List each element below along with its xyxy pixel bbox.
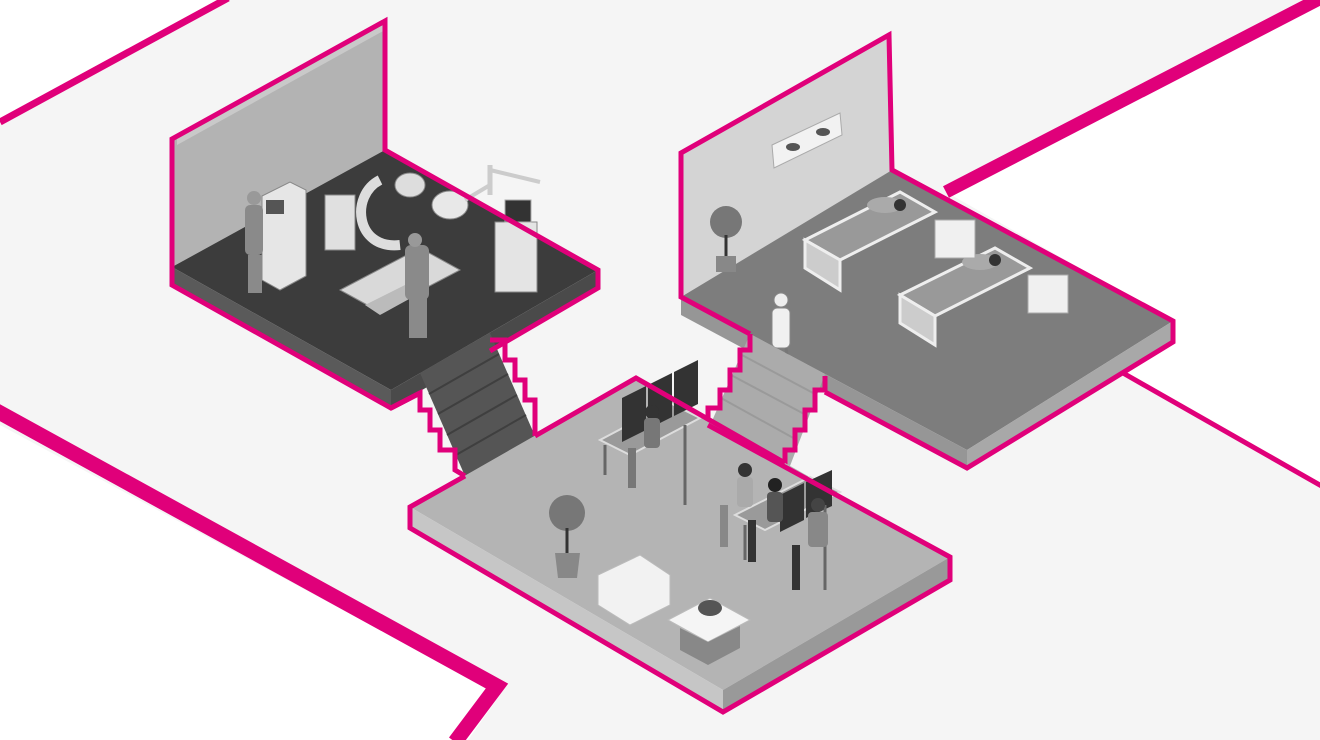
ward: bed 2: [900, 248, 1030, 345]
OR: C-arm: [325, 173, 425, 250]
OR: surgical lamp: [432, 165, 540, 219]
ward: wall shelf: [772, 113, 842, 168]
ward: nurse: [772, 293, 792, 398]
waiting: plant: [549, 495, 585, 578]
room outlines: [172, 21, 1173, 712]
ward: bed 1: [805, 192, 935, 290]
room: ward: [681, 35, 1173, 468]
waiting: people: [628, 405, 828, 590]
OR: operating table: [340, 248, 460, 315]
ward: plant: [710, 206, 742, 272]
room: operating room: [172, 21, 598, 408]
waiting: chairs row 1: [600, 360, 700, 505]
ward: bedside tables: [935, 220, 1068, 313]
stairs: ward to waiting room: [708, 334, 825, 466]
OR equipment: anesthesia machine: [262, 182, 306, 290]
stairs: OR to waiting room: [391, 333, 535, 476]
room: waiting room: [410, 360, 950, 712]
waiting: chairs row 2: [735, 470, 840, 590]
OR: surgeons: [245, 191, 429, 338]
OR: monitor cart: [495, 200, 537, 292]
waiting: coffee table: [668, 598, 750, 665]
waiting: armchair: [598, 555, 670, 625]
